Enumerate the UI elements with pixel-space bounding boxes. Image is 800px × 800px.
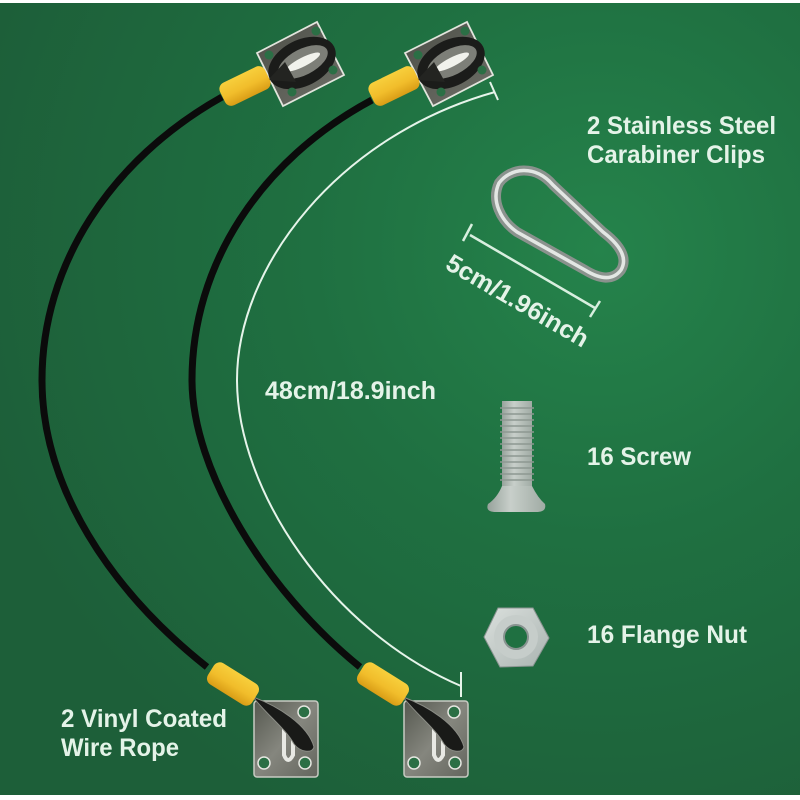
wire rope label [61, 705, 227, 762]
heading: carabiner clips: 2 Stainless Steel [587, 112, 776, 140]
bottom left plate [253, 697, 318, 777]
bottom right sleeve [354, 660, 412, 708]
carabiner dimension line [463, 224, 600, 317]
top left plate [257, 22, 345, 106]
top right sleeve [366, 64, 422, 108]
length label: 48cm/18.9inch [265, 377, 436, 405]
bottom right plate [403, 697, 468, 777]
heading: carabiner clips: Carabiner Clips [587, 141, 765, 169]
heading: carabiner clips [587, 112, 776, 169]
top right plate [405, 22, 494, 106]
icon: carabiner [496, 170, 624, 278]
top left sleeve [217, 64, 273, 108]
right wire rope [192, 22, 494, 777]
icon: flange nut [484, 608, 549, 667]
icon: screw [487, 401, 545, 512]
carabiner size label: 5cm/1.96inch [441, 249, 594, 353]
bottom left sleeve [204, 660, 262, 708]
wire rope label: 2 Vinyl Coated [61, 705, 227, 733]
flange nut label: 16 Flange Nut [587, 621, 748, 649]
left wire rope [42, 22, 345, 777]
screw label: 16 Screw [587, 443, 692, 471]
length dimension arc [237, 82, 498, 697]
wire rope label: Wire Rope [61, 734, 179, 762]
